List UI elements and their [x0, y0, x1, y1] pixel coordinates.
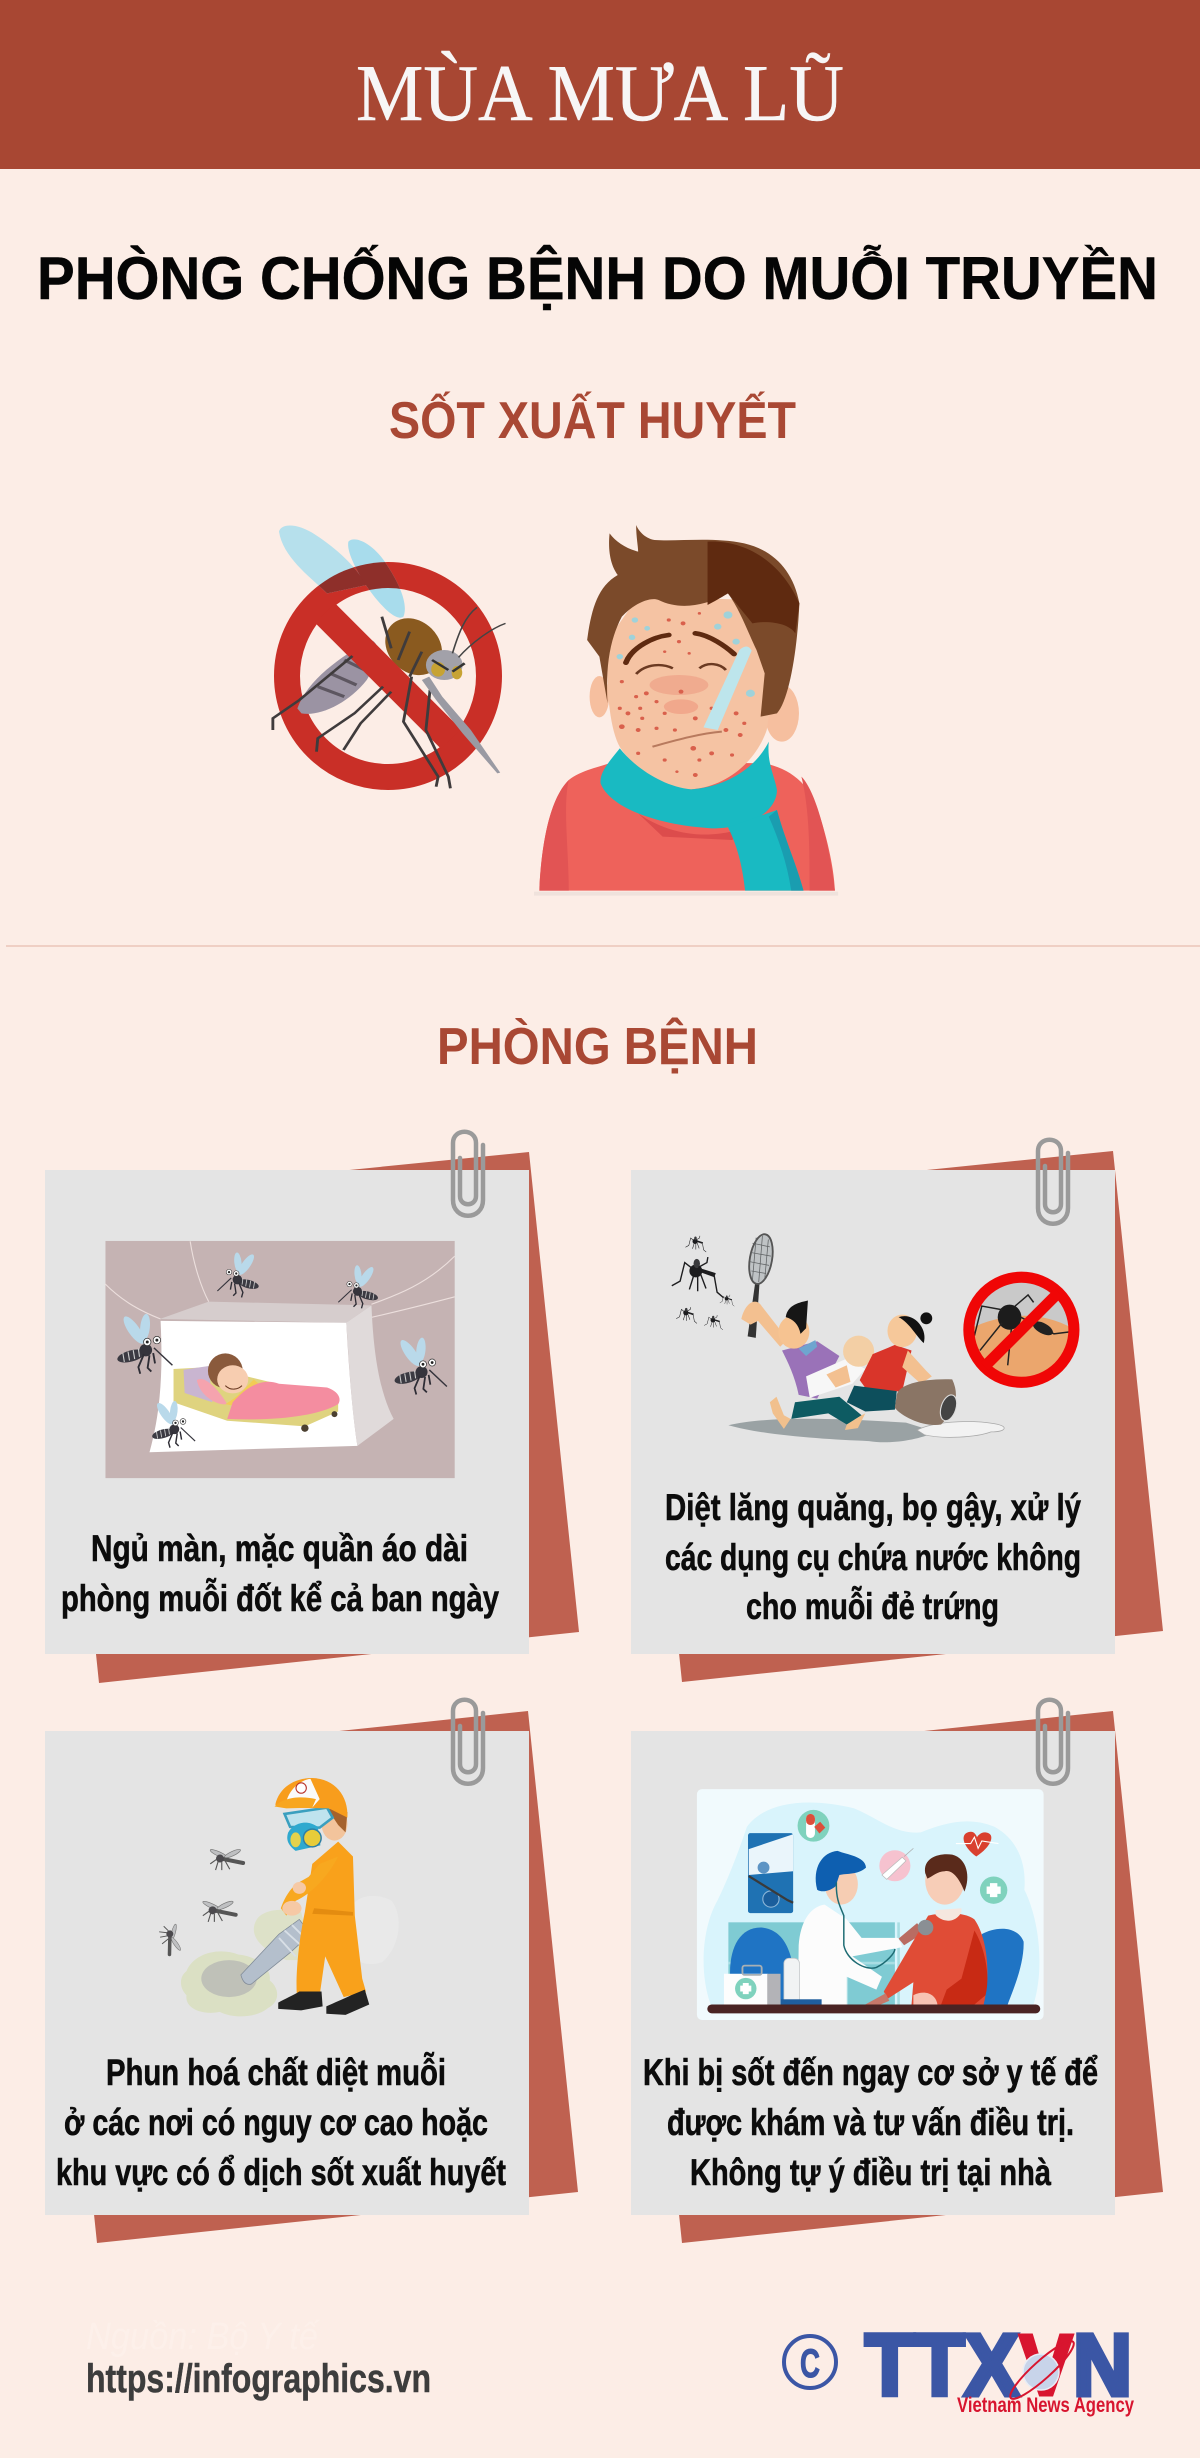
logo: copyright TTXVN — [784, 2317, 1134, 2417]
paperclip — [1038, 1700, 1068, 1784]
caption: cho muỗi đẻ trứng — [746, 1586, 999, 1627]
caption: ở các nơi có nguy cơ cao hoặc — [64, 2102, 488, 2143]
logo wordmark: TTXVN — [865, 2317, 1132, 2414]
caption: Phun hoá chất diệt muỗi — [106, 2052, 446, 2093]
agency name: Vietnam News Agency — [957, 2394, 1134, 2417]
caption — [643, 2052, 1098, 2193]
header banner — [0, 0, 1200, 169]
website url: https://infographics.vn — [86, 2357, 431, 2401]
panel: see a doctor — [631, 1700, 1163, 2243]
illustration: worker fogging mosquitoes — [158, 1778, 399, 2016]
icon: prohibited mosquito — [273, 526, 506, 788]
illustration: child sleeping under mosquito net — [105, 1241, 455, 1478]
icon: copyright mark — [784, 2336, 836, 2388]
icon: no mosquito sign — [966, 1274, 1077, 1385]
caption — [665, 1487, 1081, 1627]
icon: globe with swoosh — [1005, 2335, 1079, 2405]
caption: Diệt lăng quăng, bọ gậy, xử lý — [665, 1487, 1081, 1528]
illustration: doctor examining patient — [697, 1789, 1044, 2020]
caption: được khám và tư vấn điều trị. — [667, 2102, 1074, 2143]
caption: phòng muỗi đốt kể cả ban ngày — [61, 1578, 499, 1619]
illustration: family killing mosquitoes, emptying jar — [672, 1232, 1004, 1442]
title: MÙA MƯA LŨ: MÙA MƯA LŨ — [356, 50, 844, 138]
paperclip — [453, 1132, 483, 1216]
source: faint credit: Nguồn: Bộ Y tế — [86, 2316, 321, 2358]
paperclip — [1038, 1140, 1068, 1224]
heading: prevention: PHÒNG BỆNH — [437, 1017, 758, 1076]
icon: copyright mark: C — [800, 2342, 820, 2386]
caption: Ngủ màn, mặc quần áo dài — [91, 1528, 468, 1569]
panel: chemical spraying — [45, 1700, 578, 2243]
panel: remove larvae — [631, 1140, 1163, 1682]
panel: sleep under net — [45, 1132, 579, 1683]
heading: disease name: SỐT XUẤT HUYẾT — [389, 391, 796, 450]
divider — [6, 945, 1200, 947]
caption: Không tự ý điều trị tại nhà — [690, 2152, 1051, 2193]
paperclip — [453, 1700, 483, 1784]
caption: khu vực có ổ dịch sốt xuất huyết — [56, 2152, 506, 2193]
heading: main title: PHÒNG CHỐNG BỆNH DO MUỖI TRUYỀN — [37, 245, 1158, 312]
caption — [56, 2052, 506, 2193]
caption: các dụng cụ chứa nước không — [665, 1537, 1081, 1578]
icon: sick man with thermometer — [534, 525, 838, 896]
caption — [61, 1528, 499, 1619]
